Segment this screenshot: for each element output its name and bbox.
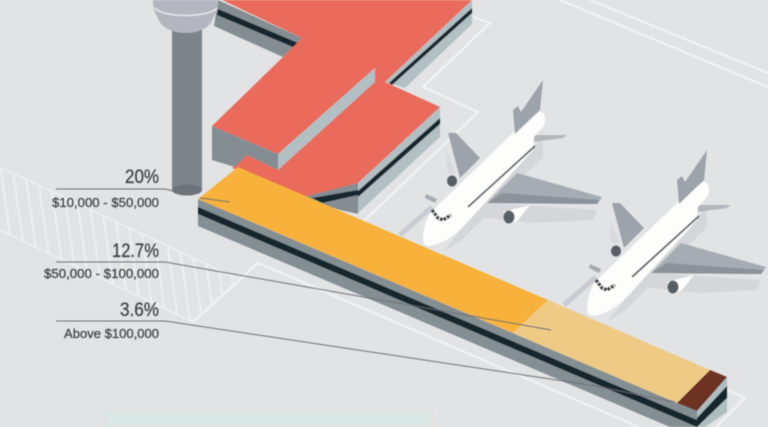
upper wall <box>214 0 302 57</box>
lower wing walls <box>303 107 440 214</box>
label: 3.6%: 3.6% <box>120 300 159 321</box>
jet bridge <box>564 277 596 305</box>
airplane 1 <box>400 80 602 252</box>
brown segment 3.6% <box>677 370 727 411</box>
label: 3.6%: Above $100,000 <box>64 326 159 341</box>
near engine <box>503 205 530 224</box>
strip side layers <box>198 199 727 427</box>
far engine <box>447 176 457 186</box>
door <box>589 264 601 273</box>
hatched runway band <box>0 167 240 322</box>
stabilizer <box>532 135 567 142</box>
fuselage <box>423 112 545 246</box>
red roof lower wing <box>232 68 440 197</box>
tower shaft <box>172 28 202 190</box>
pale segment 12.7% <box>513 300 710 403</box>
far wing <box>612 203 644 248</box>
label: 20% <box>52 167 159 210</box>
label: 3.6% <box>64 300 159 341</box>
runway markings <box>193 0 768 427</box>
front block gray face <box>212 126 278 170</box>
note panel <box>106 412 432 427</box>
plane shadow <box>607 205 707 322</box>
plane shadow <box>443 135 543 252</box>
right wall of terminal <box>385 0 472 88</box>
tail fin <box>513 80 543 134</box>
far engine <box>611 246 621 256</box>
label: 12.7% <box>44 241 159 281</box>
label: 20%: 20% <box>125 167 159 188</box>
label: 20%: $10,000 - $50,000 <box>52 195 159 210</box>
door <box>425 194 437 203</box>
near wing <box>487 173 602 204</box>
front block light face <box>278 68 375 170</box>
jet bridge <box>400 207 432 235</box>
orange segment 20% <box>198 167 548 333</box>
leader lines <box>56 189 675 402</box>
airplane 2 <box>564 150 766 322</box>
tower head <box>153 0 218 33</box>
label: 12.7%: $50,000 - $100,000 <box>44 266 159 281</box>
stabilizer <box>696 205 731 212</box>
tail fin <box>677 150 707 204</box>
far wing <box>448 133 480 178</box>
cockpit windows <box>432 210 451 220</box>
airport terminal building <box>212 0 472 214</box>
red roof upper <box>212 0 472 154</box>
near wing <box>651 243 766 274</box>
control tower <box>153 0 218 196</box>
wing fairing stripe <box>468 146 535 207</box>
label: 12.7%: 12.7% <box>112 241 159 262</box>
wing fairing stripe <box>632 216 699 277</box>
cockpit windows <box>596 280 615 290</box>
fuselage <box>587 182 709 316</box>
near engine <box>667 275 694 294</box>
bar: income share strip <box>198 167 727 427</box>
